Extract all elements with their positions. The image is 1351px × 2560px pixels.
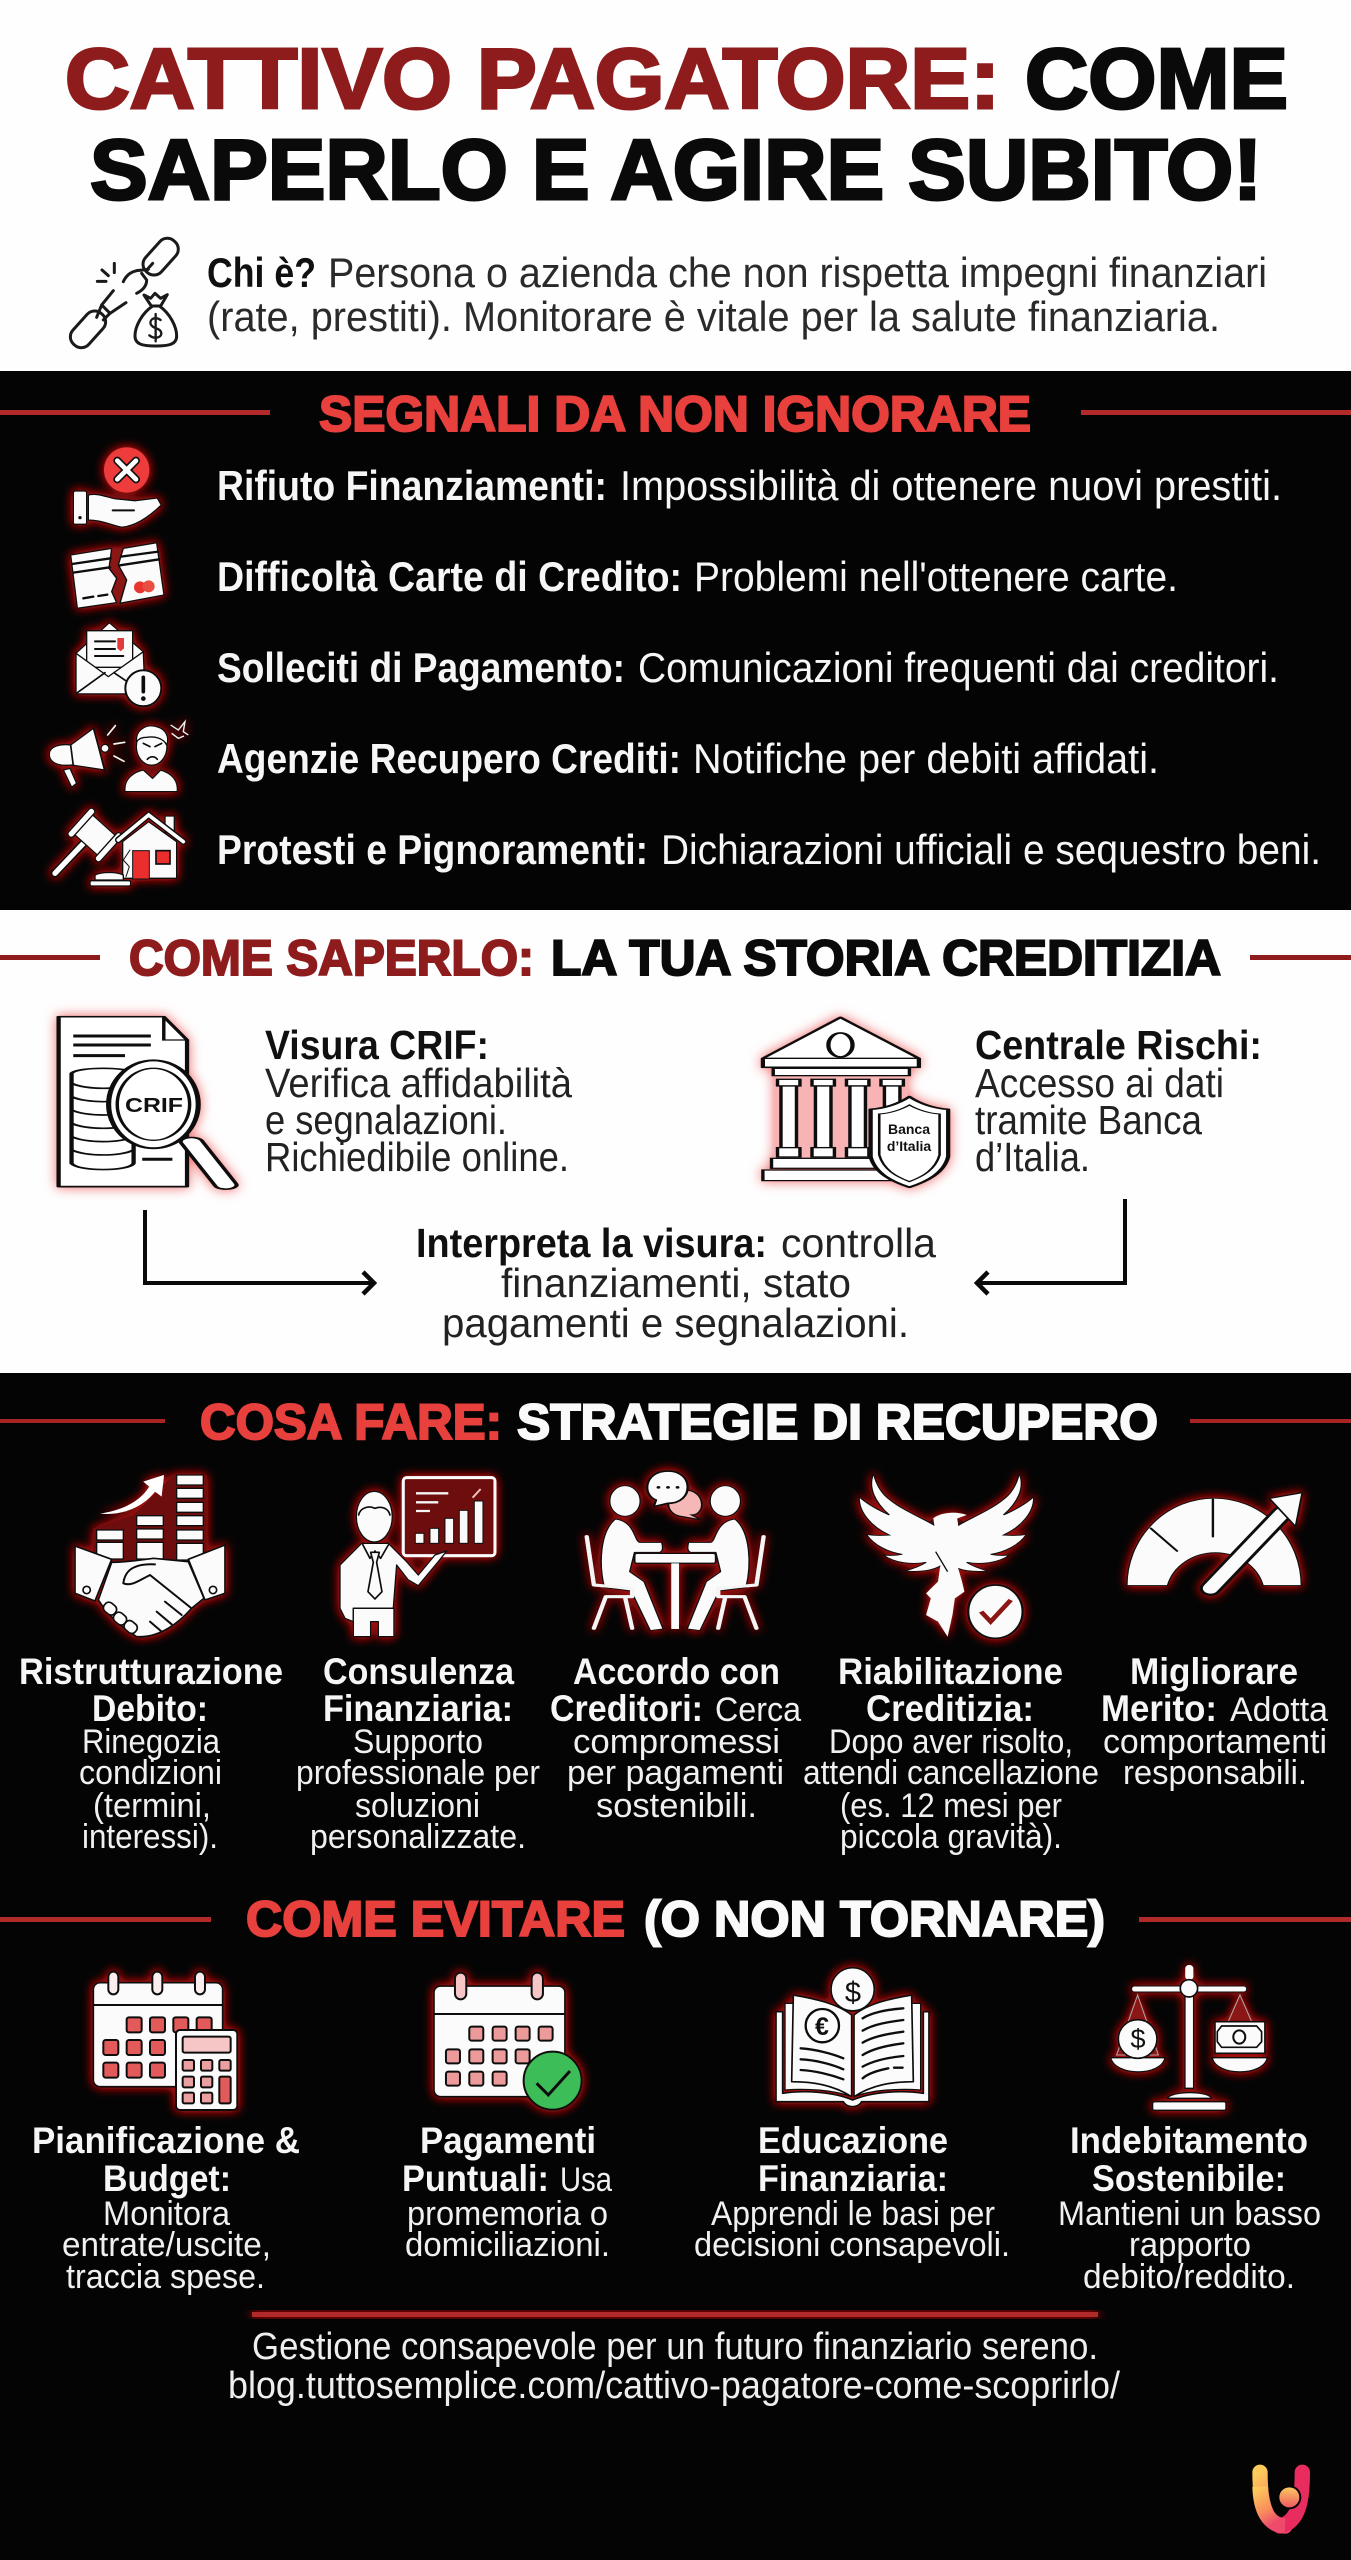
section: cosa fare bbox=[0, 1394, 1351, 1856]
footer tagline: Gestione consapevole per un futuro finanziario sereno. bbox=[252, 2326, 1098, 2368]
text block: centrale rischi bbox=[975, 1022, 1262, 1180]
icon: gavel and house bbox=[55, 807, 183, 886]
panel: come saperlo bbox=[0, 910, 1351, 1373]
title: SAPERLO E AGIRE SUBITO! bbox=[90, 123, 1262, 218]
column: consulenza finanziaria: soluzioni bbox=[355, 1787, 480, 1825]
text block: visura CRIF bbox=[265, 1022, 572, 1180]
column: ristrutturazione debito: interessi). bbox=[82, 1818, 218, 1856]
column: pianificazione e budget: traccia spese. bbox=[66, 2258, 265, 2296]
text block: interpreta la visura: Interpreta la visura: bbox=[416, 1220, 767, 1266]
row: difficolta carte di credito bbox=[217, 553, 1178, 600]
icon: consultant with chart board bbox=[340, 1478, 495, 1637]
column: accordo con creditori: compromessi bbox=[573, 1723, 780, 1761]
column: migliorare merito: responsabili. bbox=[1123, 1754, 1307, 1792]
icon: megaphone and angry man bbox=[49, 722, 188, 792]
column: accordo con creditori: per pagamenti bbox=[567, 1754, 784, 1792]
column: ristrutturazione debito: (termini, bbox=[93, 1787, 211, 1825]
column: ristrutturazione debito: Rinegozia bbox=[82, 1723, 220, 1761]
icon: rejected hand bbox=[73, 447, 161, 527]
text block: interpreta la visura bbox=[416, 1220, 936, 1346]
arrow: centrale rischi to interpretation bbox=[977, 1199, 1125, 1294]
icon: bank temple with shield: Banca bbox=[888, 1121, 930, 1137]
text block: interpreta la visura: controlla bbox=[781, 1220, 936, 1266]
column: pagamenti puntuali bbox=[402, 2120, 612, 2264]
icon: open book with coins bbox=[776, 1968, 929, 2107]
column: indebitamento sostenibile: rapporto bbox=[1129, 2226, 1251, 2264]
row: agenzie recupero crediti bbox=[217, 735, 1159, 782]
icon: bank temple with shield: d’Italia bbox=[887, 1138, 931, 1154]
column: riabilitazione creditizia bbox=[803, 1651, 1099, 1856]
column: migliorare merito bbox=[1101, 1651, 1328, 1792]
icon: payment reminder letter bbox=[76, 623, 161, 706]
column: riabilitazione creditizia: attendi cancellazione bbox=[803, 1754, 1099, 1792]
panel: segnali da non ignorare bbox=[0, 371, 1351, 910]
text block: interpreta la visura: finanziamenti, stato bbox=[501, 1260, 851, 1306]
icon: calendar and calculator bbox=[93, 1972, 237, 2110]
text block: chi e bbox=[207, 249, 1267, 340]
column: pianificazione e budget: Monitora bbox=[103, 2195, 230, 2233]
column: pianificazione e budget: Pianificazione & bbox=[32, 2120, 300, 2161]
icon: balance scale: $ bbox=[1130, 2024, 1146, 2054]
panel: intro background bbox=[0, 0, 1351, 371]
footer url: blog.tuttosemplice.com/cattivo-pagatore-come-scoprirlo/ bbox=[228, 2365, 1120, 2407]
icon: improving gauge bbox=[1127, 1493, 1302, 1588]
row: rifiuto finanziamenti: Impossibilità di ottenere nuovi prestiti. bbox=[620, 462, 1282, 509]
icon: phoenix with check bbox=[859, 1473, 1034, 1638]
column: ristrutturazione debito: condizioni bbox=[79, 1754, 222, 1792]
row: difficolta carte di credito: Problemi nell'ottenere carte. bbox=[694, 553, 1178, 600]
text block: chi e: Persona o azienda che non rispetta impegni finanziari bbox=[328, 249, 1267, 296]
heading: cosa fare: STRATEGIE DI RECUPERO bbox=[517, 1394, 1158, 1450]
text block: interpreta la visura: pagamenti e segnalazioni. bbox=[442, 1300, 909, 1346]
title: COME bbox=[1025, 32, 1288, 127]
row: protesti e pignoramenti bbox=[217, 826, 1321, 873]
row: rifiuto finanziamenti: Rifiuto Finanziamenti: bbox=[217, 462, 607, 509]
title: CATTIVO PAGATORE: bbox=[65, 32, 1000, 127]
heading: cosa fare: COSA FARE: bbox=[200, 1394, 502, 1450]
column: indebitamento sostenibile: debito/reddito. bbox=[1083, 2258, 1295, 2296]
heading: cosa fare bbox=[200, 1394, 1158, 1450]
footer bbox=[228, 2312, 1120, 2407]
column: educazione finanziaria: Educazione bbox=[758, 2120, 948, 2161]
text block: chi e: Chi è? bbox=[207, 249, 316, 296]
column: consulenza finanziaria bbox=[296, 1651, 540, 1856]
icon: open book with coins: $ bbox=[845, 1977, 861, 2009]
column: riabilitazione creditizia: Dopo aver risolto, bbox=[829, 1723, 1073, 1761]
row: difficolta carte di credito: Difficoltà Carte di Credito: bbox=[217, 553, 682, 600]
icon: meeting at a table bbox=[587, 1471, 764, 1631]
row: rifiuto finanziamenti bbox=[217, 462, 1282, 509]
text block: visura CRIF: Visura CRIF: bbox=[265, 1022, 489, 1068]
column: educazione finanziaria bbox=[694, 2120, 1010, 2264]
icon: handshake with growth bars bbox=[75, 1475, 225, 1637]
heading: come evitare: (O NON TORNARE) bbox=[644, 1891, 1105, 1947]
column: consulenza finanziaria: Consulenza bbox=[323, 1651, 514, 1692]
column: riabilitazione creditizia: piccola gravità). bbox=[840, 1818, 1062, 1856]
column: ristrutturazione debito: Ristrutturazione bbox=[19, 1651, 283, 1692]
icon: bank temple with shield bbox=[763, 1017, 948, 1187]
column: educazione finanziaria: Apprendi le basi per bbox=[711, 2195, 995, 2233]
text block: centrale rischi: Centrale Rischi: bbox=[975, 1022, 1262, 1068]
section: come evitare bbox=[0, 1891, 1351, 2296]
icon: CRIF document bbox=[59, 1017, 226, 1187]
column: riabilitazione creditizia: (es. 12 mesi per bbox=[840, 1787, 1062, 1825]
column: accordo con creditori bbox=[550, 1651, 801, 1825]
logo bbox=[1260, 2472, 1302, 2526]
column: riabilitazione creditizia: Creditizia: bbox=[866, 1688, 1034, 1729]
column: accordo con creditori: sostenibili. bbox=[596, 1787, 757, 1825]
heading: segnali: SEGNALI DA NON IGNORARE bbox=[319, 386, 1031, 442]
column: accordo con creditori: Creditori: bbox=[550, 1688, 703, 1729]
icon: broken chain and money bag bbox=[66, 234, 182, 352]
column: pagamenti puntuali: Usa bbox=[560, 2161, 612, 2199]
column: accordo con creditori: Accordo con bbox=[573, 1651, 780, 1692]
arrow: CRIF to interpretation bbox=[145, 1210, 374, 1294]
text block: chi e: (rate, prestiti). Monitorare è vitale per la salute finanziaria. bbox=[207, 293, 1220, 340]
column: pianificazione e budget: Budget: bbox=[103, 2158, 231, 2199]
column: pianificazione e budget: entrate/uscite, bbox=[62, 2226, 271, 2264]
heading: come saperlo: LA TUA STORIA CREDITIZIA bbox=[551, 930, 1221, 986]
row: solleciti di pagamento: Solleciti di Pagamento: bbox=[217, 644, 625, 691]
text block: visura CRIF: Verifica affidabilità bbox=[265, 1060, 572, 1106]
row: agenzie recupero crediti: Agenzie Recupero Crediti: bbox=[217, 735, 681, 782]
column: pagamenti puntuali: Puntuali: bbox=[402, 2158, 549, 2199]
column: migliorare merito: Adotta bbox=[1230, 1691, 1328, 1729]
text block: centrale rischi: d’Italia. bbox=[975, 1134, 1090, 1180]
column: pianificazione e budget bbox=[32, 2120, 300, 2296]
column: accordo con creditori: Cerca bbox=[715, 1691, 801, 1729]
column: migliorare merito: Merito: bbox=[1101, 1688, 1217, 1729]
icon: balance scale bbox=[1111, 1965, 1267, 2110]
column: indebitamento sostenibile: Sostenibile: bbox=[1092, 2158, 1286, 2199]
heading: come evitare bbox=[246, 1891, 1105, 1947]
column: educazione finanziaria: Finanziaria: bbox=[758, 2158, 948, 2199]
column: consulenza finanziaria: Finanziaria: bbox=[323, 1688, 513, 1729]
column: consulenza finanziaria: personalizzate. bbox=[310, 1818, 526, 1856]
column: consulenza finanziaria: professionale per bbox=[296, 1754, 540, 1792]
row: solleciti di pagamento bbox=[217, 644, 1279, 691]
panel: cosa fare and lower dark area bbox=[0, 1373, 1351, 2560]
column: pagamenti puntuali: promemoria o bbox=[407, 2195, 608, 2233]
column: migliorare merito: comportamenti bbox=[1103, 1723, 1327, 1761]
text block: centrale rischi: Accesso ai dati bbox=[975, 1060, 1224, 1106]
column: indebitamento sostenibile: Indebitamento bbox=[1070, 2120, 1308, 2161]
column: ristrutturazione debito bbox=[19, 1651, 283, 1856]
column: indebitamento sostenibile bbox=[1058, 2120, 1321, 2296]
text block: centrale rischi: tramite Banca bbox=[975, 1097, 1202, 1143]
title bbox=[65, 32, 1288, 218]
column: indebitamento sostenibile: Mantieni un basso bbox=[1058, 2195, 1321, 2233]
heading: come saperlo bbox=[129, 930, 1221, 986]
row: agenzie recupero crediti: Notifiche per debiti affidati. bbox=[693, 735, 1159, 782]
icon: broken credit card bbox=[71, 543, 164, 608]
column: pagamenti puntuali: Pagamenti bbox=[420, 2120, 596, 2161]
heading: come evitare: COME EVITARE bbox=[246, 1891, 625, 1947]
heading: come saperlo: COME SAPERLO: bbox=[129, 930, 534, 986]
icon: open book with coins: € bbox=[815, 2013, 829, 2041]
column: pagamenti puntuali: domiciliazioni. bbox=[405, 2226, 610, 2264]
column: ristrutturazione debito: Debito: bbox=[92, 1688, 208, 1729]
text block: visura CRIF: e segnalazioni. bbox=[265, 1097, 507, 1143]
icon: CRIF document: CRIF bbox=[125, 1095, 183, 1117]
row: protesti e pignoramenti: Protesti e Pignoramenti: bbox=[217, 826, 648, 873]
text block: visura CRIF: Richiedibile online. bbox=[265, 1134, 569, 1180]
row: solleciti di pagamento: Comunicazioni frequenti dai creditori. bbox=[638, 644, 1279, 691]
icon: calendar with green check bbox=[434, 1973, 582, 2110]
column: riabilitazione creditizia: Riabilitazione bbox=[838, 1651, 1063, 1692]
column: educazione finanziaria: decisioni consapevoli. bbox=[694, 2226, 1010, 2264]
column: consulenza finanziaria: Supporto bbox=[353, 1723, 483, 1761]
column: migliorare merito: Migliorare bbox=[1130, 1651, 1298, 1692]
